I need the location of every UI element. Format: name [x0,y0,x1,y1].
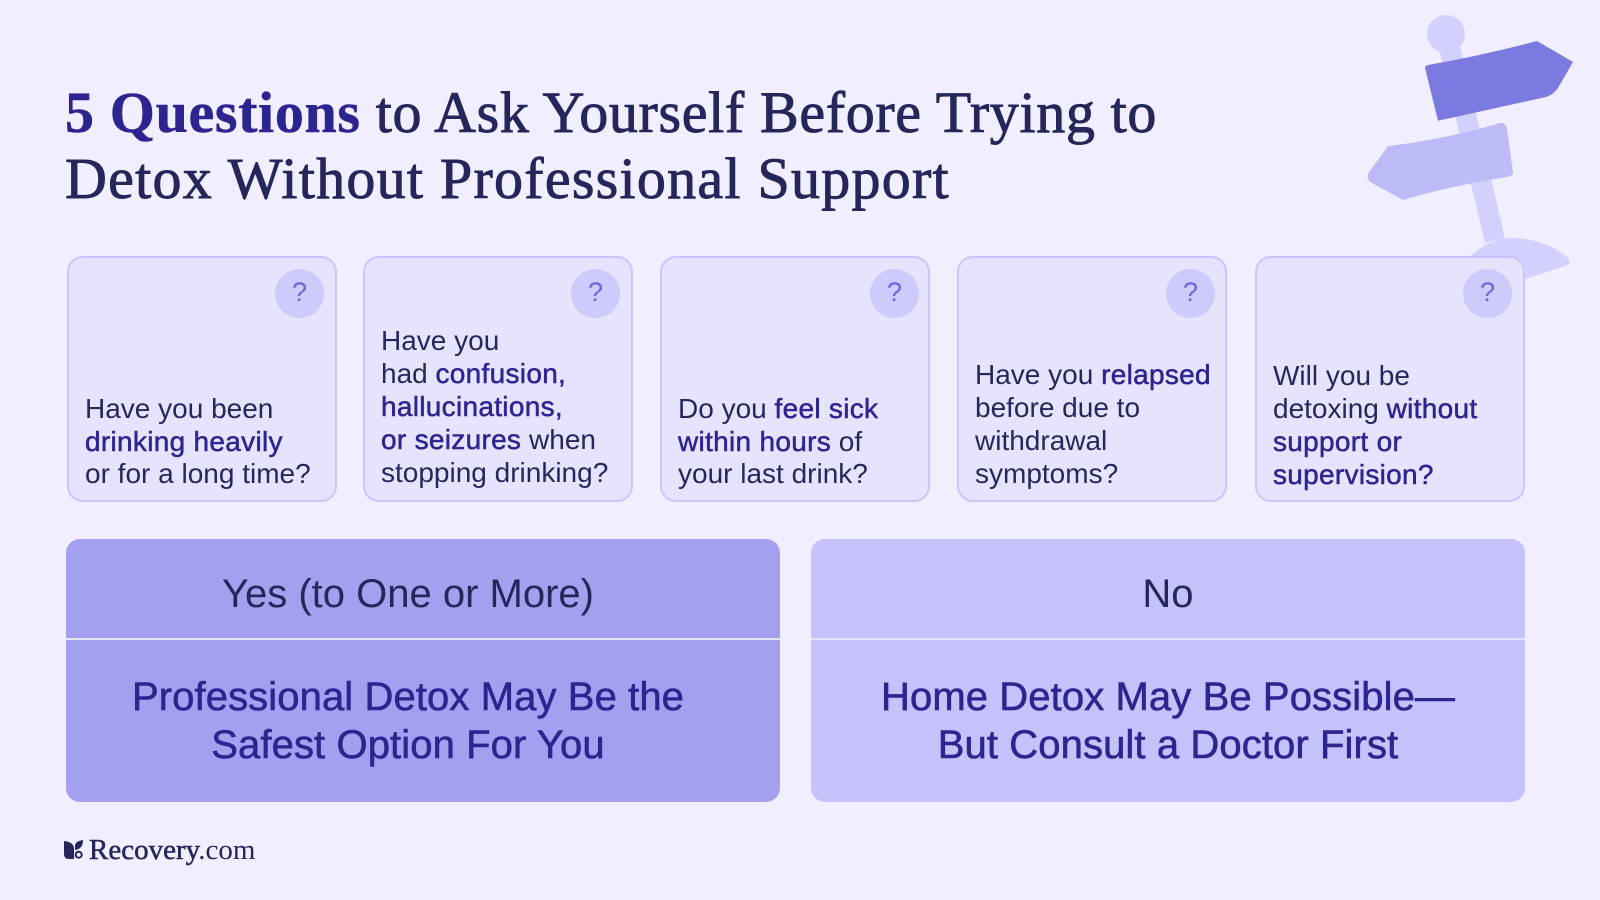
card 5: without support or supervision: ? [1480,277,1495,307]
card 4: relapsed: Have you relapsed [975,359,1211,390]
panel: no outcome: But Consult a Doctor First [938,723,1398,767]
card 5: without support or supervision [1255,256,1525,502]
panel: yes outcome: Safest Option For You [211,723,605,767]
card 4: relapsed [957,256,1227,502]
panel: yes outcome [66,539,780,802]
card 4: relapsed: ? [1183,277,1198,307]
card 5: without support or supervision: detoxing without [1273,393,1477,424]
card 2: confusion, hallucinations, seizures: hallucinations, [381,391,563,422]
card 5: without support or supervision: Will you be [1273,360,1410,391]
card 5: without support or supervision: supervision? [1273,459,1434,490]
card 2: confusion, hallucinations, seizures [363,256,633,502]
card 2: confusion, hallucinations, seizures: ? [588,277,603,307]
title [65,80,1157,211]
panel: no outcome: No [1142,572,1194,616]
card 4: relapsed: before due to [975,392,1140,423]
card 1: drinking heavily: Have you been [85,393,273,424]
panel: no outcome [811,539,1525,802]
card 5: without support or supervision: support or [1273,426,1402,457]
panel: yes outcome: Yes (to One or More) [222,572,594,616]
card 4: relapsed: withdrawal [975,425,1107,456]
card 3: feel sick within hours: ? [887,277,902,307]
card 4: relapsed: symptoms? [975,458,1118,489]
card 3: feel sick within hours [660,256,930,502]
card 3: feel sick within hours: your last drink? [678,458,868,489]
panel: yes outcome: Professional Detox May Be the [132,675,684,719]
card 2: confusion, hallucinations, seizures: or seizures when [381,424,596,455]
title: 5 Questions to Ask Yourself Before Trying to [65,80,1157,145]
card 2: confusion, hallucinations, seizures: stopping drinking? [381,457,608,488]
card 1: drinking heavily [67,256,337,502]
card 2: confusion, hallucinations, seizures: had confusion, [381,358,566,389]
card 3: feel sick within hours: within hours of [678,426,862,457]
panel: no outcome: Home Detox May Be Possible— [881,675,1455,719]
logo: Recovery.com [89,834,255,866]
icon: signpost illustration [1368,15,1573,279]
card 2: confusion, hallucinations, seizures: Have you [381,325,499,356]
card 1: drinking heavily: ? [292,277,307,307]
card 1: drinking heavily: or for a long time? [85,458,311,489]
card 3: feel sick within hours: Do you feel sick [678,393,878,424]
card 1: drinking heavily: drinking heavily [85,426,283,457]
title: Detox Without Professional Support [65,146,950,211]
